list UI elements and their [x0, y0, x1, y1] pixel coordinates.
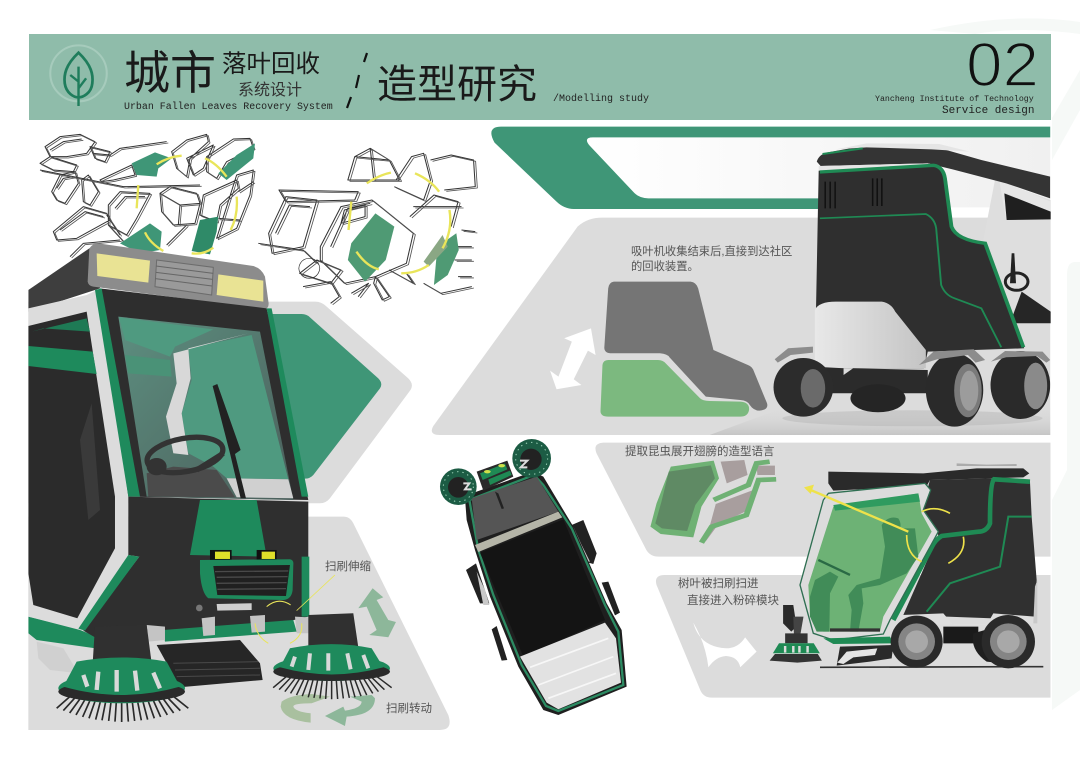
windshield: [118, 317, 293, 500]
panel: recovery device: [432, 218, 1050, 435]
arrow: leaves flow: [693, 623, 757, 667]
roof divider strip: [475, 512, 562, 552]
text: recovery note: 的回收装置。: [631, 259, 699, 273]
green arrow shape: [267, 314, 381, 479]
subtitle: english name: Urban Fallen Leaves Recovery System: [124, 101, 333, 112]
title: 城市: 城市: [124, 47, 216, 99]
white lower panel: [815, 302, 926, 368]
vents: [825, 178, 882, 208]
arrow: brush rotate: [281, 694, 375, 726]
section label: Service design: [942, 105, 1034, 117]
title: 落叶回收: 落叶回收: [222, 50, 320, 78]
rear vehicle side opening: [983, 180, 1051, 323]
sketch group: right: [258, 148, 477, 305]
side skirt: [28, 617, 97, 648]
lower front body: [83, 497, 308, 638]
panel: sweeping brush: [28, 517, 450, 730]
slash divider: [347, 53, 367, 108]
text: insect wing note: 提取昆虫展开翅膀的造型语言: [625, 444, 774, 458]
wheels: [466, 520, 620, 661]
seat: [1010, 292, 1051, 323]
sketch group: left: [40, 134, 255, 258]
right brush: [273, 613, 392, 699]
panel: right top band: [491, 127, 1050, 209]
icon: leaf logo: [50, 45, 107, 106]
windshield: [472, 477, 558, 540]
text: recovery note: [631, 244, 792, 273]
rear three-quarter vehicle: [774, 143, 1050, 427]
arrow: move up and down: [550, 328, 596, 389]
brush arm: [147, 575, 335, 643]
recovery device: gray machine silhouette: [604, 282, 767, 411]
indicator lights: [210, 550, 277, 560]
institute name: Yancheng Institute of Technology: [875, 94, 1034, 104]
left brush: [57, 625, 188, 722]
green hood stripe: [190, 500, 267, 557]
rear underside: [157, 640, 263, 687]
main roof: [480, 519, 605, 657]
text: brush extend label: 扫刷伸缩: [325, 559, 371, 573]
chassis: [825, 367, 928, 394]
header bar: [29, 31, 1051, 120]
wing form icon: [650, 460, 776, 543]
wiper: [213, 384, 246, 498]
driver silhouette: [848, 517, 918, 632]
panel: arrow backdrop: [28, 302, 412, 503]
recovery device: green module: [600, 360, 749, 417]
grille: [200, 559, 293, 600]
heading: modelling study: /Modelling study: [553, 93, 649, 105]
steering wheel: [144, 434, 226, 476]
steering column: [1010, 253, 1016, 283]
green body trim: [820, 165, 1023, 347]
arrow: brush extend: [358, 588, 396, 637]
underbody parts: [820, 637, 893, 666]
text: leaves note: [678, 576, 779, 607]
main body: [815, 165, 1024, 368]
brushes: [440, 439, 551, 505]
seat: [147, 467, 235, 497]
front grille module: [477, 461, 513, 491]
top view vehicle: [440, 439, 627, 715]
steering wheel and dash: [818, 560, 850, 575]
cab door frame: [800, 483, 938, 640]
panel: leaves swept in: [656, 575, 1050, 698]
white lower sill: [900, 613, 1037, 625]
roof: [828, 463, 1029, 491]
cab glass: [808, 493, 932, 632]
roof lights: [97, 253, 150, 283]
text: leaves note: 树叶被扫刷扫进: [678, 576, 759, 590]
text: leaves note: 直接进入粉碎模块: [687, 593, 779, 607]
title: 系统设计: 系统设计: [238, 81, 302, 99]
front view vehicle: [28, 243, 392, 722]
front frame: [100, 288, 308, 500]
heading: 造型研究: 造型研究: [377, 63, 537, 107]
ground line: [820, 664, 1043, 670]
roof: [28, 243, 269, 312]
side window: [28, 312, 115, 618]
ground shadow: [782, 410, 1043, 426]
text: recovery note: 吸叶机收集结束后,直接到达社区: [631, 244, 792, 258]
text: brush rotate label: 扫刷转动: [386, 701, 432, 715]
side frame: [28, 290, 128, 629]
panel: insect wing language: [595, 443, 1050, 557]
side brush: [770, 605, 822, 663]
page number: 02: [966, 31, 1039, 100]
green trim: [893, 479, 1030, 620]
rear box: [903, 478, 1037, 620]
rear wheels: [774, 347, 1050, 427]
roof: [817, 143, 1050, 198]
side view vehicle: [800, 463, 1043, 668]
background watermark: [930, 18, 1080, 710]
white rear panel: [520, 623, 621, 709]
hull: [465, 472, 627, 715]
yellow airflow arrow: [804, 485, 964, 563]
wheels: [891, 615, 1035, 668]
green trim: [95, 288, 140, 497]
